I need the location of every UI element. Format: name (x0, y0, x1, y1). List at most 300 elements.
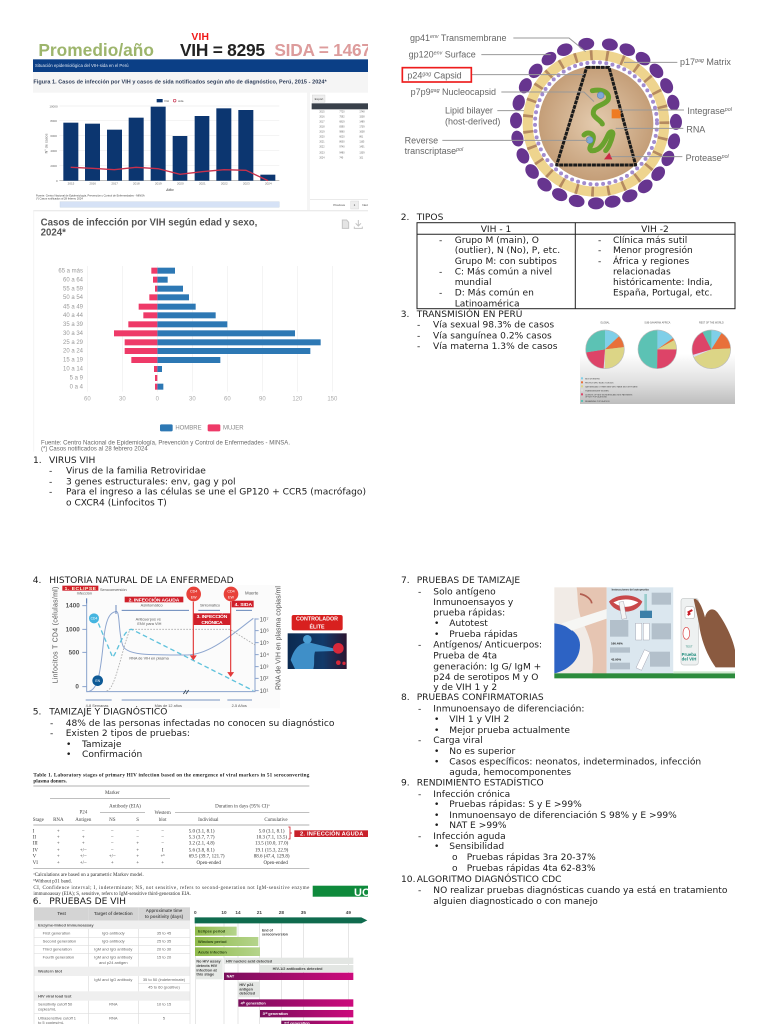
icons: document and download (342, 220, 362, 228)
table headers: P24 (79, 811, 88, 816)
timeline day labels: 21 (257, 910, 262, 915)
axes labels: (*) Casos notificados al 28 febrero 2024 (36, 196, 83, 200)
heading: VIH label: VIH (191, 32, 209, 43)
table headers: Antibody (EIA) (109, 804, 141, 809)
protease triangle (604, 153, 612, 159)
table rows: Open-ended (196, 861, 221, 866)
label: 2. infección aguda: 2. INFECCIÓN AGUDA (300, 829, 363, 837)
bar chart card (33, 93, 307, 211)
table headers: Individual (198, 818, 219, 823)
table rows: 19.1 (15.3, 22.9) (255, 848, 289, 853)
red stage labels (62, 586, 254, 626)
column VIH-2: - (598, 246, 601, 256)
x axis labels: 0 (156, 396, 160, 402)
small annotations: Muerte (245, 590, 259, 595)
table headers: NS (109, 818, 116, 823)
viral core (539, 66, 653, 181)
text block: 5 tamizaje y diagnóstico: Confirmación (82, 749, 142, 760)
text block: 7 pruebas de tamizaje: PRUEBAS DE TAMIZAJE (417, 576, 520, 586)
age labels (58, 268, 84, 390)
pie legend: CLIENTS OF SEX WORKERS AND SEX PARTNERS (585, 393, 633, 396)
table rows: VI (33, 861, 38, 866)
virus labels: Capsid (431, 70, 462, 80)
axes labels: 2018 (133, 182, 140, 186)
table rows: 69.5 (39.7, 121.7) (189, 855, 225, 860)
table header: to positivity (days) (145, 914, 184, 919)
x axis labels: 30 (189, 396, 196, 402)
magenta test bars (224, 973, 353, 1024)
text block: 7 pruebas de tamizaje (401, 576, 542, 693)
table rows: II (33, 835, 36, 840)
chart legend: sida (178, 99, 184, 103)
x axis labels: 60 (224, 396, 231, 402)
pie legend: PEOPLE WHO INJECT DRUGS (585, 382, 614, 384)
text block: 1 virus VIH: 1. (33, 456, 42, 466)
age labels: 10 a 14 (63, 367, 84, 373)
RNA strands (584, 90, 613, 151)
green timeline arrow (195, 917, 367, 923)
bracket (288, 827, 292, 839)
table: VIH-1 vs VIH-2: VIH - 1 (481, 225, 511, 235)
virus labels: Integrase (687, 106, 725, 116)
pyramid legend: MUJER (223, 426, 244, 432)
table header: Approximate time (146, 908, 183, 913)
left axis labels: 500 (69, 649, 80, 656)
text block: 5 tamizaje y diagnóstico (33, 706, 335, 760)
pie: global (585, 330, 625, 369)
pyramid title: Casos de infección por VIH según edad y sexo, (41, 218, 258, 229)
label: 2. infección aguda (294, 829, 368, 837)
text block: 1 virus VIH: Para el ingreso a las células se une el GP120 + CCR5 (macrófago) (66, 486, 366, 498)
column VIH-1: D: Más común en (455, 289, 534, 299)
table rows: + (57, 861, 60, 866)
right axis labels: 10⁴ (260, 652, 269, 659)
integrase square (612, 109, 621, 118)
data table card: 8600 (339, 142, 345, 144)
right axis labels: 10⁵ (260, 640, 269, 647)
x axis labels: 60 (84, 396, 91, 402)
virus labels: p7p9 (411, 87, 431, 97)
axes labels: Año (165, 187, 174, 192)
table cells: 15 to 20 (157, 954, 172, 959)
table header: Target of detection (94, 911, 133, 916)
data table card: 1 (354, 203, 356, 207)
axes (87, 598, 255, 692)
data table card: 1339 (359, 152, 365, 154)
table cells: IgG antibody (102, 931, 125, 936)
red circles CD4 + EW: CD4 (227, 590, 235, 594)
table rows: +ᵇ (160, 854, 165, 860)
green banner fragment: UC (354, 887, 370, 899)
text block: 7 pruebas de tamizaje: generación: Ig G/ IgM + (433, 662, 541, 672)
small annotations: 2-5 Años (232, 704, 247, 708)
table rows: 88.6 (47.4, 129.8) (254, 855, 290, 860)
table footnotes: ᵃCalculations are based on a parametric Markov model. (33, 873, 144, 878)
table: VIH-1 vs VIH-2: VIH -2 (641, 225, 669, 235)
data table card: 1739 (359, 127, 365, 129)
axes labels: 2015 (68, 182, 75, 186)
table rows: III (33, 841, 38, 846)
green banner fragment (313, 886, 370, 899)
nucleocapsid and reverse transcriptase dots (586, 92, 604, 143)
data table card: 1451 (359, 147, 365, 149)
virus labels: Surface (442, 50, 476, 60)
virus labels: pol (724, 107, 733, 113)
table cells (38, 931, 186, 1024)
right axis labels (260, 586, 282, 695)
table cells: 20 to 30 (157, 947, 172, 952)
left axis labels (52, 587, 80, 691)
axes labels: 2021 (199, 182, 206, 186)
text block: 7 pruebas de tamizaje: Inmunoensayos y (433, 598, 514, 608)
grid lines (87, 266, 332, 392)
text block: 10 algoritmo diagnóstico CDC: - (418, 886, 421, 896)
heading: 4 historia natural: 4. (33, 576, 41, 586)
text block: 10 algoritmo diagnóstico CDC: NO realizar pruebas diagnósticas cuando ya está en tratamiento (433, 885, 728, 896)
x axis labels: 150 (327, 396, 338, 402)
text block: 8 pruebas confirmatorias: Inmunoensayo de diferenciación: (433, 704, 584, 714)
text block: 5 tamizaje y diagnóstico: - (50, 719, 53, 729)
table rows: V (33, 855, 37, 860)
age labels: 0 a 4 (70, 384, 84, 390)
table rows: − (161, 835, 164, 840)
hand (694, 599, 735, 667)
axes labels: 4000 (50, 149, 57, 153)
data table card: 1538 (359, 117, 365, 119)
text block: 5 tamizaje y diagnóstico: Tamizaje (81, 740, 122, 750)
timeline day labels (194, 910, 351, 915)
text block: 10 algoritmo diagnóstico CDC: 10. (401, 875, 415, 885)
text block: 8 pruebas confirmatorias: 8. (401, 693, 410, 703)
column VIH-1 (439, 236, 560, 309)
age labels: 60 a 64 (63, 277, 84, 283)
text block: 5 tamizaje y diagnóstico: 48% de las personas infectadas no conocen su diagnóstico (66, 718, 335, 729)
callout: controlador élite: CONTROLADOR (296, 617, 338, 623)
red circles CD4 + EW: EW (191, 595, 197, 599)
text block: 1 virus VIH: 3 genes estructurales: env, gag y pol (66, 478, 236, 488)
red stage labels: 4. SIDA (235, 602, 253, 608)
test strip: TEST (686, 644, 693, 648)
data table card: 2018 (319, 127, 325, 129)
heading: 4 historia natural: HISTORIA NATURAL DE LA ENFERMEDAD (49, 576, 234, 586)
axes labels: 2020 (177, 182, 184, 186)
table headers: Stage (33, 818, 45, 823)
phase bars: Acute infection (198, 949, 227, 954)
age labels: 40 a 44 (63, 313, 84, 319)
virus labels: Transmembrane (439, 33, 507, 43)
timeline day labels: 35 (301, 910, 306, 915)
text block: 3 transmisión en Perú: - (417, 332, 420, 342)
magenta test bars: NAT (227, 975, 235, 979)
text block: 3 transmisión en Perú: 3. (401, 310, 409, 320)
pie legend (581, 377, 638, 403)
table rows: − (111, 830, 114, 835)
small annotations: RNA de VIH en plasma (129, 657, 170, 661)
table rows: − (136, 830, 139, 835)
virus labels: env (430, 34, 439, 40)
column VIH-2 (598, 236, 713, 299)
table headers: Marker (105, 791, 120, 796)
capsid trapezoid (557, 67, 636, 165)
age labels: 50 a 54 (63, 295, 84, 301)
red highlight box: p24 capsid (402, 68, 471, 82)
blue band title: Situación epidemiológica del VIH-sida en el Perú (35, 63, 129, 68)
small annotations: Sintomático (200, 603, 220, 607)
data table card: 2015 (319, 112, 325, 114)
gray detection bars (195, 958, 353, 997)
text block: 5 tamizaje y diagnóstico: • (66, 750, 71, 760)
table rules (33, 786, 309, 868)
text block: 7 pruebas de tamizaje: Prueba rápidas (449, 630, 518, 640)
data table card: 101 (359, 158, 364, 160)
panel: population pyramid by age and sex (33, 210, 368, 452)
end of seroconversion note: End of (262, 928, 274, 932)
source note: (*) Casos notificados al 28 febrero 2024 (41, 446, 148, 452)
timeline day labels: 10 (221, 910, 227, 915)
text block: 1 virus VIH: o CXCR4 (Linfocitos T) (66, 498, 167, 508)
text block: 5 tamizaje y diagnóstico: • (66, 740, 71, 750)
table rows: − (136, 835, 139, 840)
small annotations: Asintomático (141, 603, 163, 607)
age labels: 35 a 39 (63, 322, 84, 328)
data table card (310, 93, 369, 211)
text block: 3 transmisión en Perú: - (417, 342, 420, 352)
right axis labels: 10³ (260, 665, 268, 671)
gray detection bars: No HIV assay (196, 960, 221, 964)
red arrows (191, 602, 233, 676)
virus labels: Reverse (405, 135, 438, 145)
text block: 3 transmisión en Perú: Vía sexual 98.3% de casos (433, 321, 554, 331)
table rows: I (33, 830, 35, 835)
red circles CD4 + EW (186, 587, 238, 601)
axes labels: 2016 (89, 182, 96, 186)
small annotations: Seroconversión (100, 588, 127, 592)
x axis labels: 30 (119, 396, 126, 402)
infographic: oral test instructions: 166.49% (611, 642, 623, 646)
table rows: 5.6 (3.8, 8.1) (189, 848, 215, 853)
text block: 1 virus VIH: - (49, 466, 52, 476)
sida line (71, 167, 268, 181)
text block: 9 rendimiento estadístico: • (434, 800, 439, 810)
text block: 8 pruebas confirmatorias (401, 693, 701, 778)
table rows: − (111, 835, 114, 840)
blue band title (33, 59, 368, 72)
text block: 7 pruebas de tamizaje: • (434, 619, 439, 629)
chart: timeline of test detection (194, 910, 367, 1024)
virus labels: RNA (686, 124, 705, 134)
data table card: 1748 (359, 112, 365, 114)
chart legend: VIH (164, 99, 169, 103)
text block: 9 rendimiento estadístico: Infección aguda (433, 831, 506, 842)
blue dots: EN (95, 679, 101, 683)
column VIH-1: Grupo M (main), O (455, 236, 539, 246)
text block: 8 pruebas confirmatorias: • (434, 726, 439, 736)
heading: VIH average: VIH = 8295 (180, 40, 265, 60)
table rows: + (57, 848, 60, 853)
table: HIV tests (34, 907, 190, 1024)
data table card: 7720 (339, 112, 345, 114)
data table card: 1165 (359, 142, 365, 144)
text block: 9 rendimiento estadístico: • (434, 811, 439, 821)
table section labels (38, 922, 94, 998)
table rows: + (57, 855, 60, 860)
text block: 1 virus VIH: VIRUS VIH (49, 456, 95, 466)
text block: 7 pruebas de tamizaje: p24 de serotipos M y O (433, 673, 538, 683)
table cells: 25 to 35 (157, 939, 172, 944)
end of seroconversion note: seroconversion (262, 933, 288, 937)
table rows: ᵇWithout p31 band. (33, 878, 72, 884)
text block: 3 transmisión en Perú: Vía sanguínea 0.2% casos (433, 332, 552, 342)
virus labels: p24 (407, 70, 422, 80)
red circles CD4 + EW: CD4 (190, 590, 197, 594)
leader lines (442, 38, 684, 157)
data table card: 740 (339, 158, 344, 160)
table rows: + (161, 861, 164, 866)
table rows: + (136, 855, 139, 860)
timeline day labels: 49 (346, 910, 351, 915)
table rows: + (57, 841, 60, 846)
axes labels: 2017 (111, 182, 118, 186)
infographic: oral test instructions: 43.90% (611, 658, 621, 662)
table cells: IgG antibody (102, 939, 125, 944)
table cells: 45 to 60 (positive) (148, 985, 181, 990)
text block: 3 transmisión en Perú (401, 308, 558, 352)
gray detection bars: detected (239, 992, 256, 996)
table rows: 10.3 (7.1, 13.5) (256, 835, 287, 840)
text block: 1 virus VIH: - (49, 478, 52, 488)
x axis labels: 90 (259, 396, 266, 402)
phase bars: Window period (198, 939, 227, 944)
heading: Promedio/año: Promedio/año (38, 40, 154, 60)
axes labels: Fuente: Centro Nacional de Epidemiología, Prevención y Control de Enfermedades - MINSA (36, 194, 145, 198)
text block: 8 pruebas confirmatorias: Mejor prueba actualmente (449, 726, 570, 736)
small annotations: Anticuerpos vs (136, 617, 161, 621)
blue dots: CD4 (91, 617, 97, 621)
red stage labels: 3. INFECCIÓN (197, 612, 228, 620)
table headers: Duration in days (95% CI)ᵃ (215, 804, 270, 809)
chart: three pie charts with legend (580, 320, 735, 404)
virus labels: gag (422, 71, 431, 77)
data table card: Previous (333, 203, 345, 207)
column VIH-1: - (439, 267, 442, 277)
table rows: 5.3 (3.7, 7.7) (189, 835, 215, 840)
text block: 9 rendimiento estadístico: - (418, 790, 421, 800)
magenta test bars: 4ᵗʰ generation (241, 1000, 266, 1005)
text block: 9 rendimiento estadístico: RENDIMIENTO ESTADÍSTICO (417, 776, 544, 788)
pyramid legend: HOMBRE (175, 426, 202, 432)
table rows: I (162, 848, 164, 853)
text block: 9 rendimiento estadístico (401, 776, 677, 874)
heading: 6 pruebas de VIH: PRUEBAS DE VIH (49, 897, 126, 907)
age labels: 5 a 9 (70, 376, 84, 382)
small annotations (77, 588, 259, 708)
text block: 8 pruebas confirmatorias: - (418, 736, 421, 746)
table rows: + (82, 835, 85, 840)
infographic: oral test instructions: Instrucciones del autoprueba (612, 588, 649, 592)
red stage labels: 1. ECLIPSE (65, 586, 97, 592)
column VIH-2: - (598, 236, 601, 246)
axes labels: 0 (56, 179, 58, 183)
table cells: IgM and IgG antibody (94, 977, 132, 982)
virus labels (405, 33, 733, 163)
table rows: 5.0 (3.1, 8.1) (259, 830, 285, 835)
table header (57, 908, 184, 919)
table title: Table 1. Laboratory stages of primary HIV infection based on the emergence of viral markers in 51 seroconverting (33, 772, 310, 778)
text block: 10 algoritmo diagnóstico CDC (401, 873, 728, 907)
heading: 2 tipos (401, 213, 444, 223)
diagram: HIV virion structure (384, 20, 752, 209)
text block: 7 pruebas de tamizaje: • (434, 630, 439, 640)
image: rapid test collage (554, 587, 735, 678)
table rows: IV (33, 848, 38, 853)
timeline day labels: 14 (235, 910, 241, 915)
table cells: copies/mL (38, 1007, 57, 1012)
virus labels: Lipid bilayer (445, 105, 493, 115)
table headers: RNA (53, 818, 64, 823)
text block: 8 pruebas confirmatorias: • (434, 758, 439, 768)
panel: bar chart screenshot of yearly cases (33, 32, 371, 213)
gray detection bars: HIV p24 (239, 983, 254, 987)
text block: 8 pruebas confirmatorias: PRUEBAS CONFIRMATORIAS (417, 693, 544, 703)
table cells: 10 to 15 (157, 1002, 172, 1007)
pie titles: REST OF THE WORLD (699, 323, 724, 325)
table section labels: HIV viral load test (38, 993, 72, 998)
table headers: Western (155, 811, 171, 816)
column VIH-2: históricamente: India, (613, 277, 713, 288)
text block: 3 transmisión en Perú: TRANSMISIÓN EN PERÚ (416, 308, 522, 320)
table cells: First generation (43, 931, 70, 936)
data table card: 1638 (359, 132, 365, 134)
table: VIH-1 vs VIH-2 (417, 223, 735, 309)
text block: 5 tamizaje y diagnóstico: TAMIZAJE Y DIAGNÓSTICO (48, 706, 167, 718)
virus labels: gag (695, 58, 704, 64)
table cells: Sensitivity cutoff 50 (38, 1002, 73, 1007)
text block: 10 algoritmo diagnóstico CDC: ALGORITMO DIAGNÓSTICO CDC (417, 873, 562, 885)
virus labels: gag (431, 88, 440, 94)
heading: SIDA average: SIDA = 1467 (274, 40, 371, 60)
heading: 2 tipos: 2. (401, 213, 409, 223)
data table card: 7592 (339, 117, 345, 119)
x axis labels (84, 396, 338, 402)
curve: viral RNA (87, 612, 253, 692)
data table card: 2022 (319, 147, 325, 149)
text block: 9 rendimiento estadístico: - (418, 832, 421, 842)
data table card: Export (315, 97, 323, 101)
table rows: − (161, 830, 164, 835)
figure title: Figura 1. Casos de infección por VIH y casos de sida notificados según año de diagnóstico, Perú, 2015 - 2024* (33, 79, 328, 85)
pie legend: SEX WORKERS (585, 378, 600, 380)
photo: oral swab (554, 587, 607, 678)
test strip: del VIH (682, 657, 696, 662)
text block: 7 pruebas de tamizaje: Antígenos/ Anticuerpos: (433, 640, 542, 650)
green strip (554, 673, 735, 678)
gray detection bars: this stage (196, 973, 214, 977)
pie: rest of the world (692, 330, 731, 369)
table cells: Third generation (43, 947, 72, 952)
timeline day labels: 28 (279, 910, 284, 915)
table rows: + (57, 830, 60, 835)
text block: 8 pruebas confirmatorias: aguda, hemocomponentes (449, 768, 571, 778)
data table card: 2020 (319, 137, 325, 139)
bars: mujer (114, 268, 157, 390)
text block: 7 pruebas de tamizaje: prueba rápidas: (433, 608, 505, 618)
column VIH-1: Latinoamérica (455, 298, 520, 309)
table rows: +/− (80, 848, 87, 853)
pie: Sub-Saharan Africa (638, 330, 677, 369)
axes labels: 8000 (50, 119, 57, 123)
table rows: + (136, 861, 139, 866)
gray detection bars: antigen (239, 987, 254, 991)
